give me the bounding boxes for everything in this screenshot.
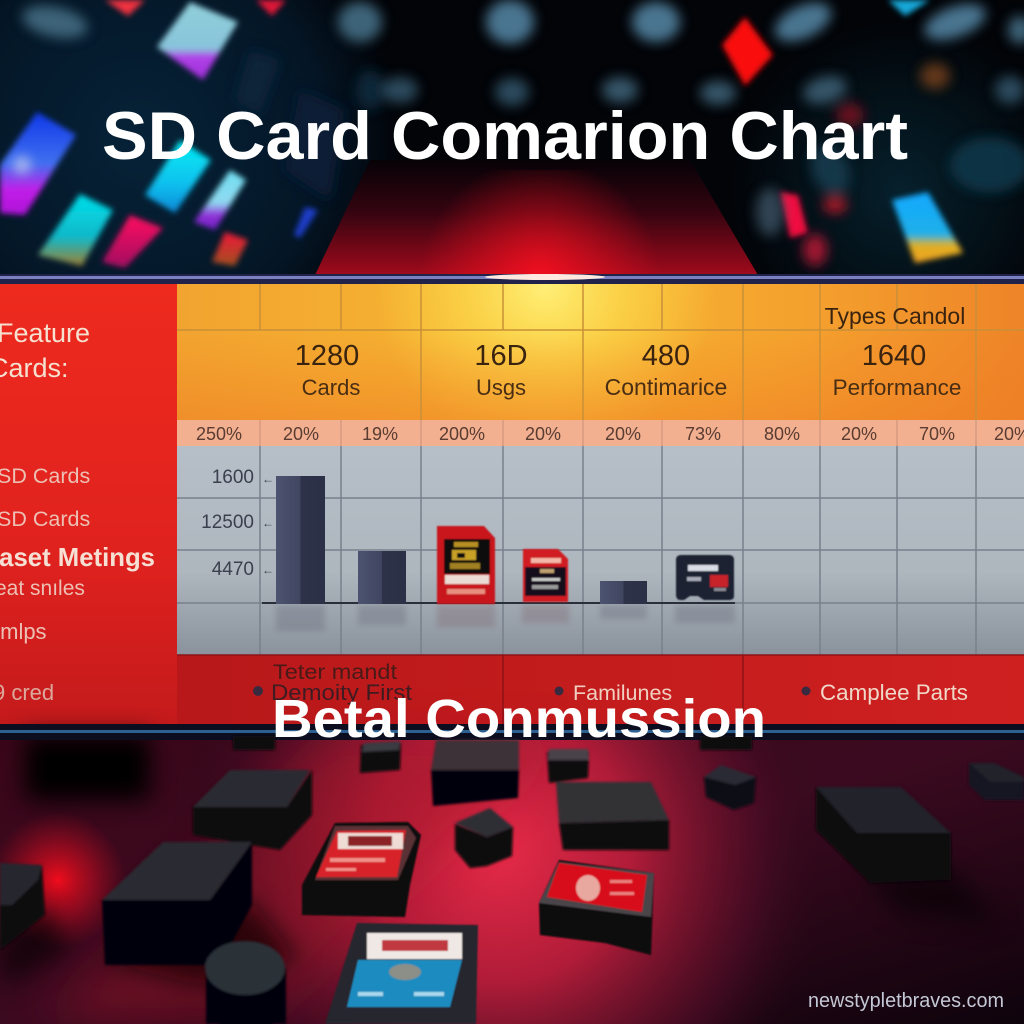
axis labels: 12500 (201, 512, 254, 533)
panel: header band: 1280 (295, 340, 359, 372)
back pieces (233, 736, 275, 750)
shadows on floor (0, 735, 1000, 990)
icon: blue SD card on floor (325, 923, 478, 1024)
background: dark tech backdrop (0, 0, 1024, 280)
icon: red SD card on floor (302, 822, 421, 917)
percent row (177, 420, 1024, 446)
panel: header band (177, 284, 1024, 420)
panel: footer legend: Demoity First (271, 680, 412, 705)
axis labels: ← (262, 472, 274, 486)
panel: footer legend: Familunes (573, 681, 672, 705)
bar chart (177, 446, 1024, 655)
axis labels: 4470 (212, 559, 254, 580)
floor with scattered cards (0, 724, 1024, 1024)
percent row: 250% (196, 424, 242, 444)
percent row: 80% (764, 424, 800, 444)
panel: header band: 480 (642, 340, 690, 372)
icon: large SD card (437, 526, 495, 604)
axis labels: 1600 (212, 467, 254, 488)
icon: small SD card (523, 549, 568, 602)
subtitle: Betal Conmussion (272, 689, 766, 749)
panel: footer legend (177, 655, 1024, 724)
chart panel (0, 274, 1024, 724)
panel: header band: Contimarice (605, 374, 727, 400)
panel: header band: Types Candol (825, 303, 965, 329)
percent row: 20% (283, 424, 319, 444)
percent row: 20% (525, 424, 561, 444)
axis labels: ← (262, 516, 274, 530)
percent row: 73% (685, 424, 721, 444)
title: SD Card Comarion Chart (102, 98, 908, 174)
percent row: 20% (605, 424, 641, 444)
panel: sidebar (0, 284, 177, 724)
card pieces (193, 770, 312, 850)
panel: footer legend: Camplee Parts (820, 680, 968, 705)
axis labels (201, 467, 274, 580)
panel: header band: Usgs (476, 375, 526, 400)
panel: footer legend: Teter mandt (273, 661, 397, 684)
panel: header band: 16D (474, 340, 528, 372)
top frame bar (0, 274, 1024, 284)
icon: red microSD on floor (539, 860, 654, 955)
bars (276, 476, 325, 604)
panel: header band: 1640 (862, 340, 926, 372)
percent row: 19% (362, 424, 398, 444)
panel: header band: Cards (302, 375, 360, 400)
percent row: 70% (919, 424, 955, 444)
percent row: 20% (841, 424, 877, 444)
axis labels: ← (262, 563, 274, 577)
panel: header band: Performance (833, 375, 961, 400)
percent row: 200% (439, 424, 485, 444)
watermark: newstypletbraves.com (808, 990, 1004, 1012)
icon: microSD card (676, 555, 734, 600)
